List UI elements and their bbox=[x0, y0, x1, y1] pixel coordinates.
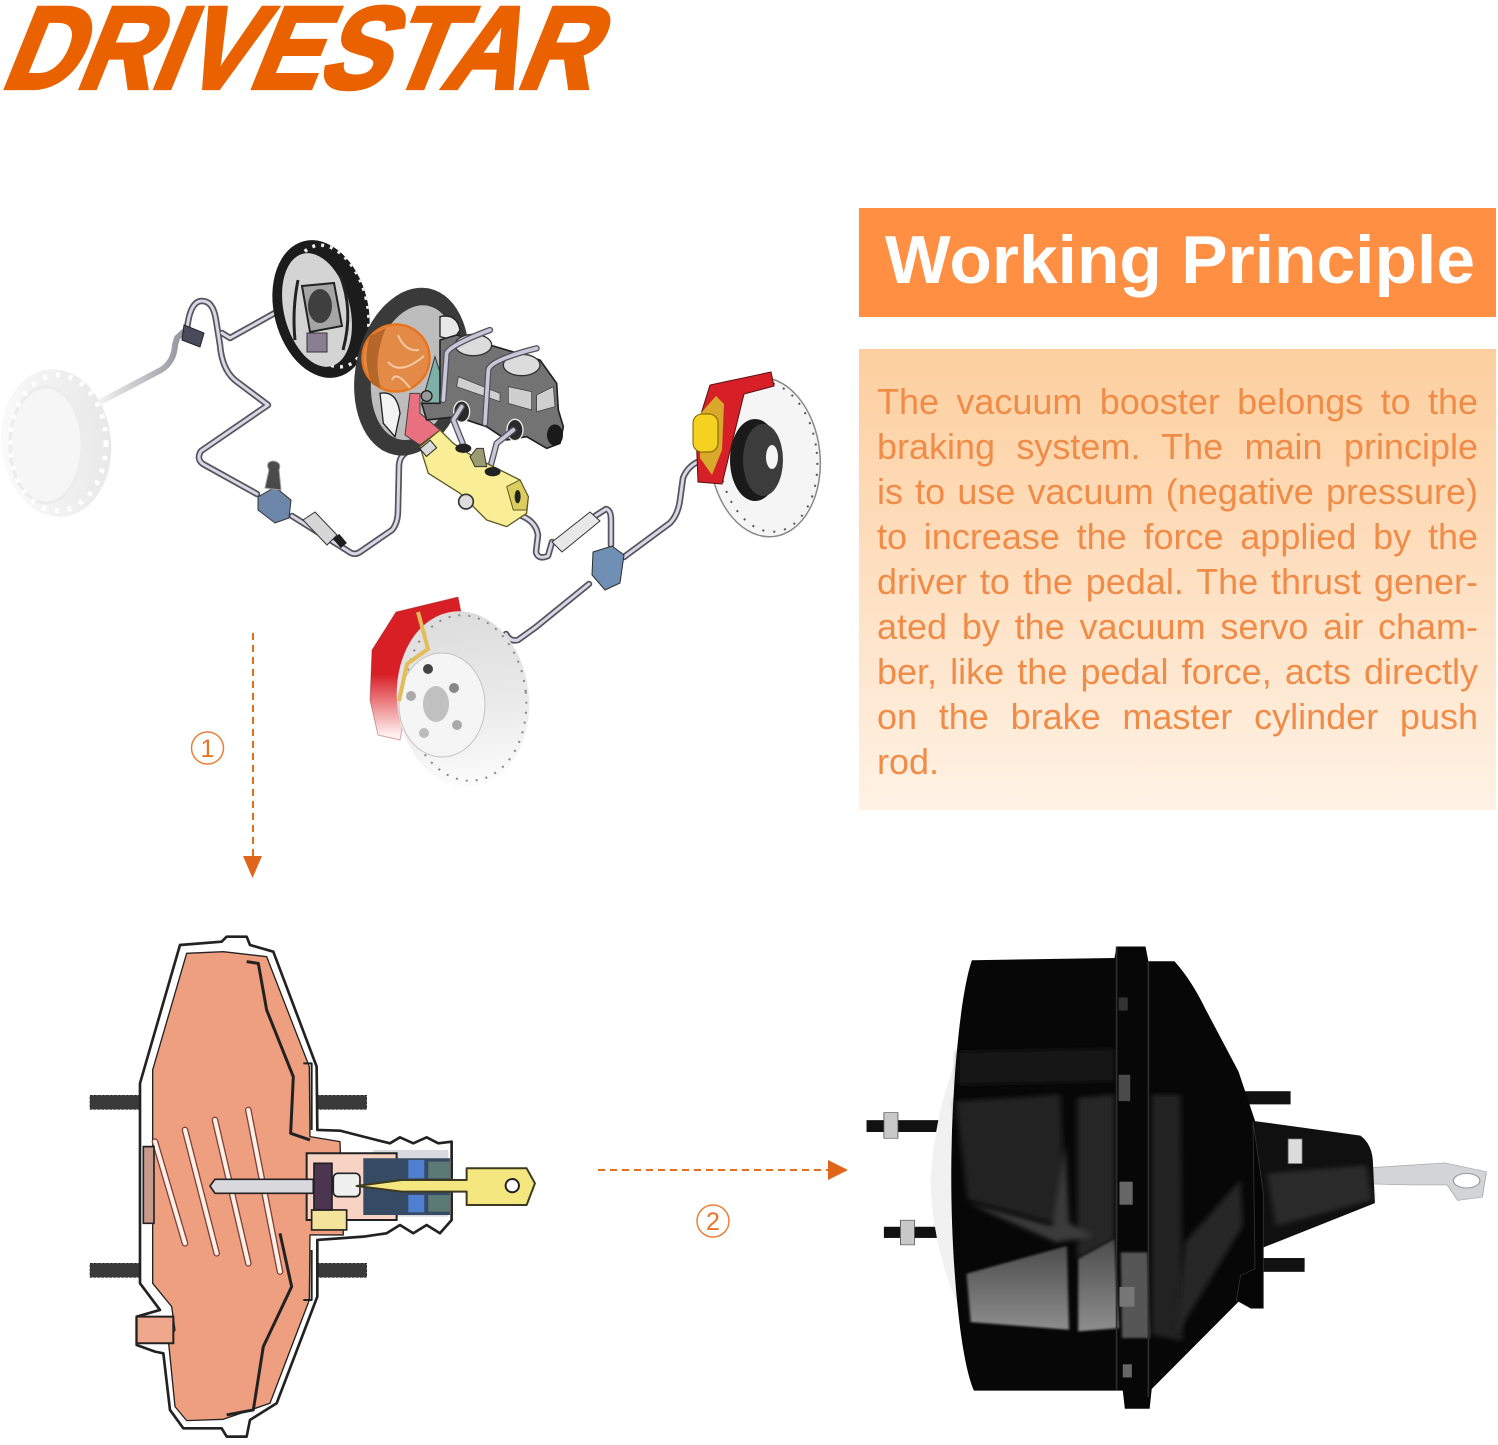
body paragraph: driver to the pedal. The thrust gener- bbox=[877, 561, 1478, 602]
product photo: black vacuum booster bbox=[867, 946, 1486, 1409]
cutaway vacuum booster bbox=[90, 937, 535, 1437]
silver filters bbox=[303, 512, 600, 552]
yellow proportioning valve bbox=[420, 430, 528, 527]
flange seam and bolts bbox=[1117, 946, 1148, 1397]
drum brake bbox=[258, 230, 384, 388]
right disc brake bbox=[693, 372, 828, 542]
input rod and clevis bbox=[357, 1168, 535, 1205]
reaction disc bbox=[314, 1163, 332, 1210]
title bar: Working Principle: Working Principle bbox=[885, 222, 1475, 298]
brake system diagram bbox=[0, 230, 828, 793]
left blue valve bbox=[258, 461, 291, 523]
push rod bbox=[210, 1179, 313, 1193]
body paragraph: The vacuum booster belongs to the bbox=[877, 381, 1478, 422]
vacuum booster behind master cylinder bbox=[339, 277, 484, 466]
master cylinder bbox=[421, 334, 563, 448]
mounting studs bbox=[90, 1095, 367, 1277]
arrow 1: diagram to cutaway bbox=[243, 633, 262, 878]
left studs and nuts bbox=[867, 1113, 947, 1245]
diaphragm line bbox=[227, 962, 312, 1415]
panel: description text bbox=[859, 349, 1496, 810]
right studs bbox=[1243, 1091, 1305, 1272]
cone nut bbox=[1288, 1139, 1302, 1164]
main shell bbox=[951, 946, 1263, 1409]
body paragraph bbox=[877, 381, 1478, 782]
body paragraph: ated by the vacuum servo air cham- bbox=[877, 606, 1478, 647]
mounting bracket bbox=[1236, 1121, 1263, 1308]
outer shell bbox=[137, 937, 452, 1437]
reflections bbox=[955, 1048, 1372, 1341]
rear face sliver bbox=[931, 1062, 968, 1325]
step marker 1: 1 bbox=[201, 735, 214, 763]
body paragraph: to increase the force applied by the bbox=[877, 516, 1478, 557]
bellows shading bbox=[373, 1150, 448, 1217]
body paragraph: is to use vacuum (negative pressure) bbox=[877, 471, 1478, 512]
title bar: Working Principle bbox=[859, 208, 1496, 317]
left junction bbox=[182, 325, 204, 347]
valve housing bbox=[307, 1153, 397, 1220]
body paragraph: braking system. The main principle bbox=[877, 426, 1478, 467]
body paragraph: ber, like the pedal force, acts directly bbox=[877, 651, 1478, 692]
bent reservoir tubes bbox=[443, 330, 537, 468]
pink pushrod bracket bbox=[405, 393, 440, 445]
step marker 1 bbox=[192, 732, 224, 764]
step marker 2: 2 bbox=[706, 1208, 720, 1236]
input rod and eye bbox=[1373, 1163, 1486, 1200]
left wall bbox=[143, 1147, 154, 1223]
orange highlight circle bbox=[362, 324, 430, 392]
vacuum port bbox=[137, 1317, 173, 1343]
arrow 2: cutaway to product bbox=[598, 1160, 848, 1180]
ghost rear wheel bbox=[0, 364, 118, 522]
rear cone bbox=[1253, 1121, 1375, 1247]
body paragraph: rod. bbox=[877, 741, 939, 782]
brake lines bbox=[102, 300, 702, 640]
return springs bbox=[155, 1110, 280, 1272]
step marker 2 bbox=[697, 1205, 729, 1237]
lower disc brake bbox=[370, 597, 538, 793]
salmon chamber bbox=[153, 952, 343, 1421]
booster, master cylinder and valve cluster bbox=[339, 277, 563, 527]
right blue junction bbox=[592, 546, 624, 590]
body paragraph: on the brake master cylinder push bbox=[877, 696, 1478, 737]
